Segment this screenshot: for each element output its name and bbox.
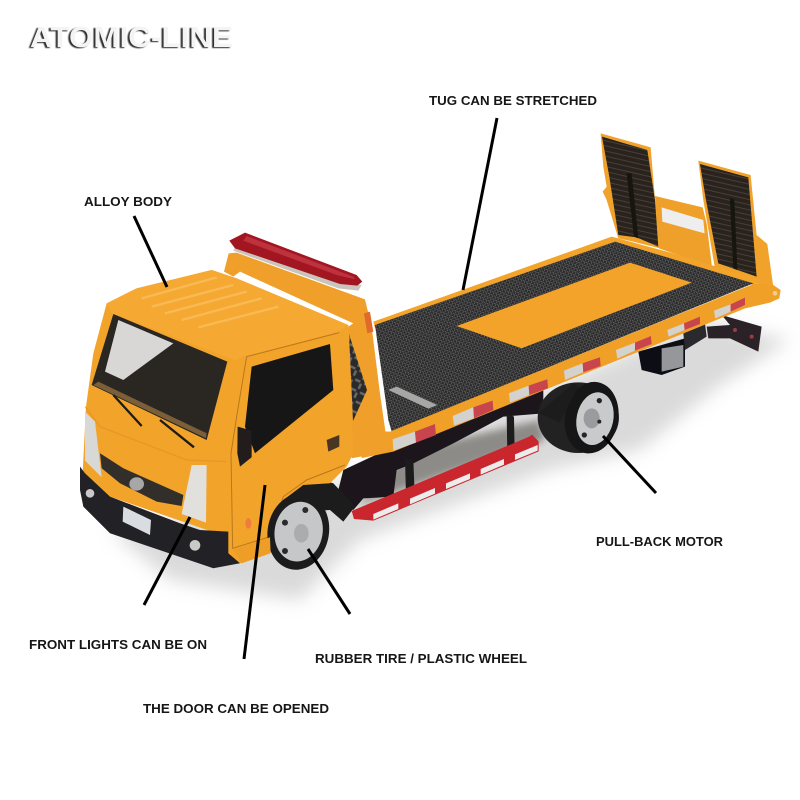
callout: front lights — [29, 517, 207, 652]
title: brand name: ATOMIC-LINE — [30, 22, 233, 54]
callout: rubber tire — [308, 549, 527, 666]
fog lights — [86, 489, 200, 551]
side window — [245, 344, 333, 453]
bumper — [80, 467, 240, 568]
callout: pull-back motor: PULL-BACK MOTOR — [596, 535, 723, 549]
front wheel — [261, 489, 335, 575]
orange rack frame — [224, 253, 388, 458]
cab step — [233, 537, 271, 563]
light bar — [229, 233, 362, 291]
door seam — [231, 333, 345, 548]
rail hinge — [773, 291, 777, 296]
callout: alloy body: ALLOY BODY — [84, 195, 173, 209]
step posts — [405, 413, 515, 495]
callout: front lights: FRONT LIGHTS CAN BE ON — [29, 638, 207, 652]
roof rack with light bar — [224, 233, 388, 458]
right headlight — [182, 465, 207, 523]
door marker — [245, 518, 251, 529]
callout: door — [143, 485, 329, 716]
callout: rubber tire: RUBBER TIRE / PLASTIC WHEEL — [315, 652, 527, 666]
hood crease — [85, 407, 227, 462]
rear hitch and bracket — [638, 315, 762, 375]
number plate — [123, 507, 151, 535]
bracket plate — [707, 315, 762, 352]
wheel arch — [273, 481, 355, 522]
door handle — [327, 435, 339, 452]
tail marker — [364, 312, 373, 333]
callout: alloy body — [84, 195, 173, 287]
frame beam — [337, 387, 543, 510]
rear mudguard — [538, 383, 578, 423]
cab body — [83, 270, 353, 563]
callout: tug: TUG CAN BE STRETCHED — [429, 94, 597, 108]
rear hub — [571, 389, 618, 449]
right ramp — [698, 161, 773, 287]
side rail — [350, 283, 781, 458]
truck illustration — [80, 133, 781, 575]
left headlight — [85, 412, 102, 477]
callout: door: THE DOOR CAN BE OPENED — [143, 702, 329, 716]
windshield — [92, 314, 227, 447]
bed rail back — [373, 237, 760, 328]
side step — [352, 435, 539, 521]
reflective stripe segments — [393, 298, 745, 451]
grey deck bar — [388, 387, 437, 409]
orange deck panel — [457, 263, 692, 348]
left ramp — [601, 133, 660, 248]
flatbed — [350, 133, 781, 458]
side mirror — [237, 427, 252, 467]
rear tire — [538, 378, 624, 458]
grille — [100, 453, 183, 506]
rear panel between ramps — [655, 196, 712, 267]
callout: pull-back motor — [596, 436, 723, 549]
wipers — [113, 395, 194, 447]
callout: tug — [429, 94, 597, 290]
cab — [80, 270, 355, 575]
tread plate behind cab — [349, 334, 367, 421]
deck tread plate — [375, 242, 753, 432]
roof — [107, 270, 348, 360]
chassis and rear wheel — [337, 378, 624, 521]
ground shadow — [110, 320, 790, 600]
